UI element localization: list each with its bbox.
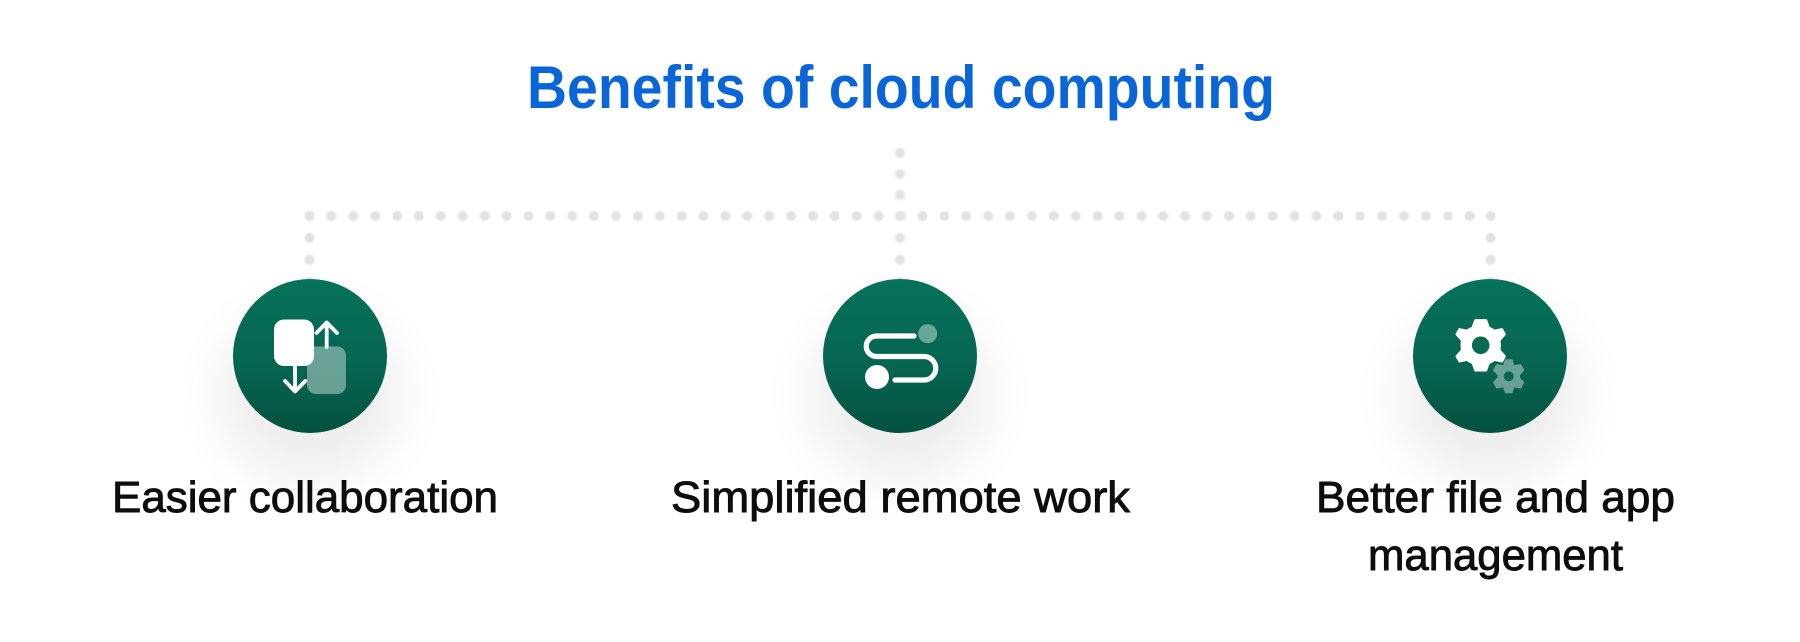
label: better file and app management: management: [1368, 531, 1623, 580]
panel: easier collaboration: [112, 279, 498, 522]
label: easier collaboration: Easier collaboration: [112, 473, 498, 522]
title: Benefits of cloud computing: [527, 54, 1275, 121]
icon: overlapping cards with arrows: [274, 320, 346, 394]
label: better file and app management: [1316, 473, 1675, 580]
icon: winding path with two dots: [865, 324, 937, 389]
label: better file and app management: Better file and app: [1316, 473, 1675, 522]
icon disc: remote work: [823, 279, 977, 433]
dotted connector: [310, 152, 1491, 282]
label: simplified remote work: Simplified remote work: [671, 473, 1131, 522]
panel: better file and app management: [1316, 279, 1675, 580]
icon: two gears: [1457, 320, 1524, 393]
icon disc: management: [1413, 279, 1567, 433]
panel: simplified remote work: [671, 279, 1131, 522]
icon disc: collaboration: [233, 279, 387, 433]
